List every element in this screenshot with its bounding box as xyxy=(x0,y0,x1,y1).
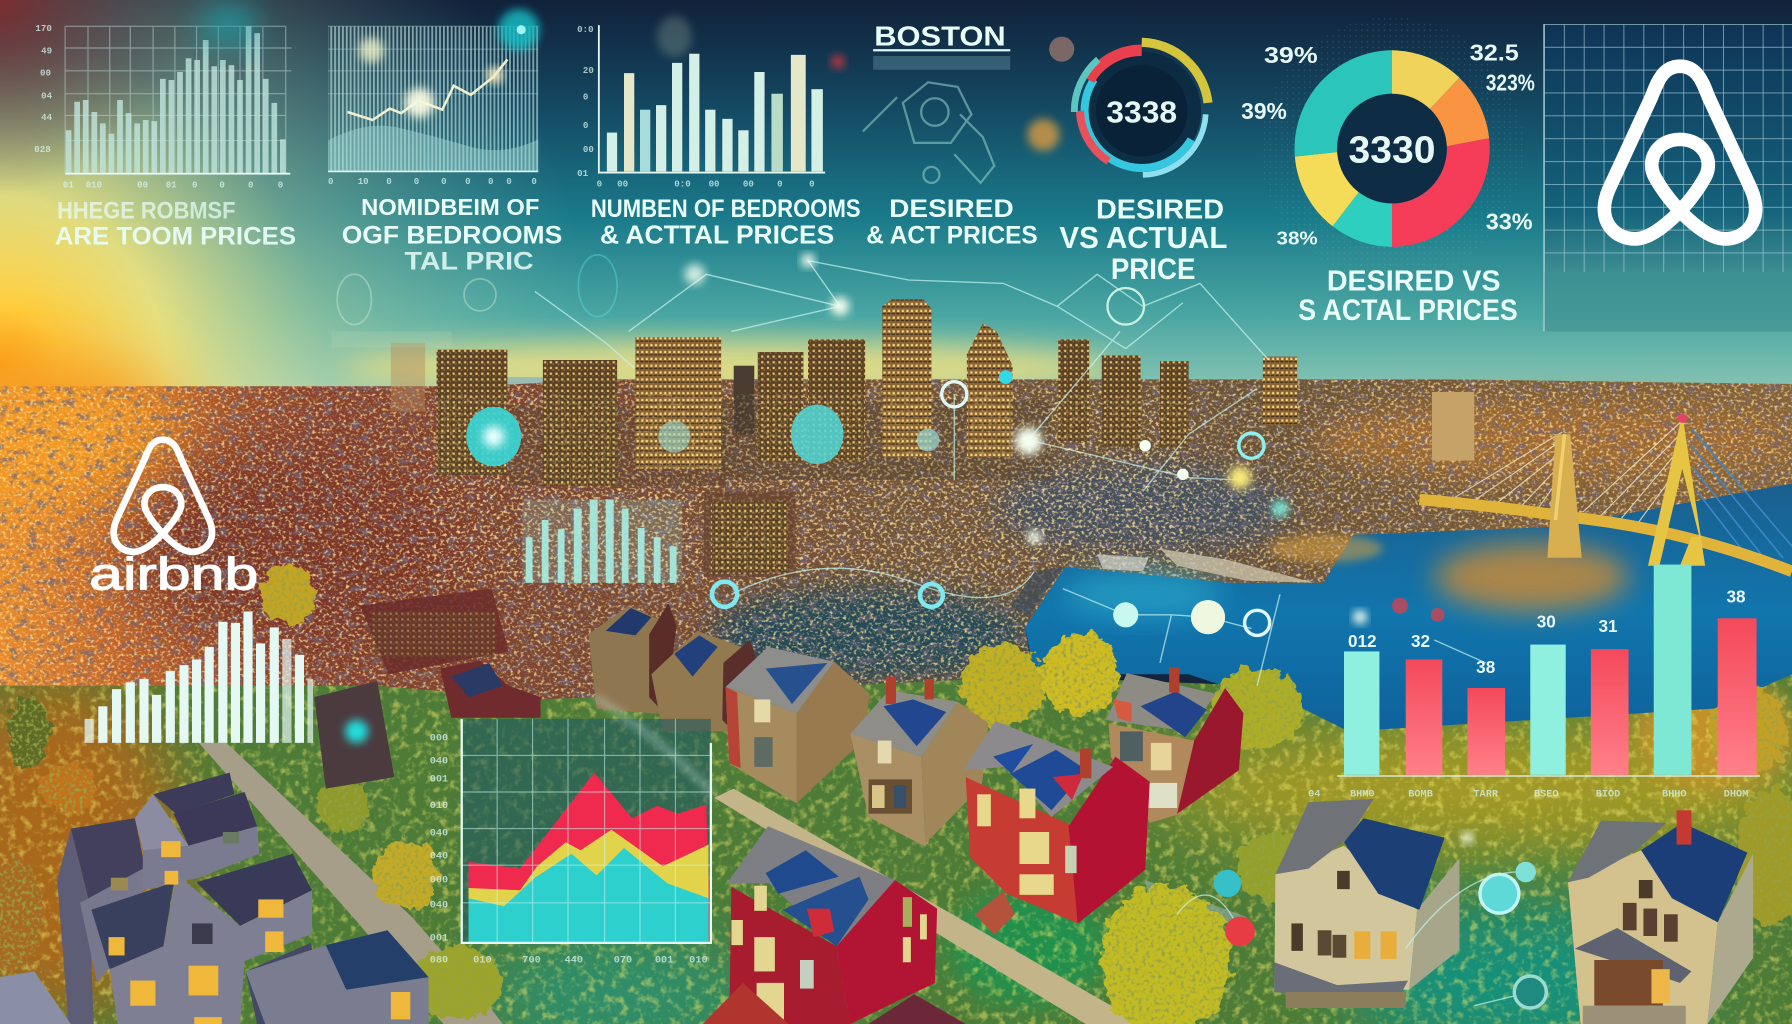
red area xyxy=(469,773,711,942)
chart: small ring gauge xyxy=(1027,33,1220,189)
chart 1 axis labels: 0 xyxy=(219,179,225,190)
chart 3 axis labels: 01 xyxy=(577,168,589,179)
glow streak xyxy=(594,697,714,794)
bar axis labels: BHM0 xyxy=(1350,789,1375,801)
chart 1 axis labels: 010 xyxy=(86,179,102,190)
area chart labels: 440 xyxy=(565,954,583,966)
heading: chart 3 caption: & ACTTAL PRICES xyxy=(600,219,834,249)
chart: desired vs actual price bars xyxy=(1308,565,1760,801)
chart 2 axis labels xyxy=(328,176,537,187)
chart 3 axis labels: 0:0 xyxy=(674,178,691,189)
skyline of downtown towers xyxy=(391,299,1474,583)
chart 3 axis labels: 0 xyxy=(809,178,815,189)
yellow area xyxy=(469,830,709,942)
chart 1 axis labels: 00 xyxy=(40,67,51,78)
heading: chart 3 caption: NUMBEN OF BEDROOMS xyxy=(591,195,861,223)
heading: desired vs actual price: PRICE xyxy=(1111,253,1195,286)
icon: large Airbnb logo xyxy=(1604,66,1756,239)
bar value labels: 38 xyxy=(1726,586,1746,606)
bar value labels: 38 xyxy=(1476,657,1495,677)
heading: chart 1 caption: ARE TOOM PRICES xyxy=(55,223,296,251)
chart 2 axis labels: 0 xyxy=(414,176,419,187)
chart: bedrooms bar chart xyxy=(577,16,845,189)
chart 3 bars xyxy=(607,54,823,171)
ringed nodes xyxy=(712,288,1546,1008)
panel: harbor water xyxy=(1025,483,1792,743)
heading: chart 2 caption: TAL PRIC xyxy=(405,248,534,276)
donut percentages: 39% xyxy=(1264,42,1318,68)
chart 3 axis labels: 0 xyxy=(583,120,588,131)
background: sky and sunrise glow xyxy=(0,0,1792,411)
area chart labels: 010 xyxy=(689,954,708,966)
map panel: Boston title xyxy=(873,21,1010,70)
area chart labels: 001 xyxy=(655,954,673,966)
heading: chart 1 caption xyxy=(55,197,296,251)
bar axis labels: TARR xyxy=(1473,789,1499,801)
chart 1 grid and axis xyxy=(65,26,291,174)
donut percentages: 39% xyxy=(1241,98,1287,124)
roads through the neighbourhood xyxy=(199,743,1246,1024)
bar axis labels: BHHO xyxy=(1662,789,1687,801)
chart 2 axis labels: 0 xyxy=(506,176,512,187)
bar axis labels: BSEO xyxy=(1534,789,1559,801)
chart 3 axis labels: 00 xyxy=(709,178,720,189)
bar value labels: 012 xyxy=(1348,631,1377,651)
chart 2 axis labels: 0 xyxy=(441,176,447,187)
area chart labels: 040 xyxy=(430,827,448,839)
chart 3 axis labels xyxy=(577,24,815,189)
heading: desired actual caption xyxy=(866,195,1038,249)
area chart labels: 010 xyxy=(473,954,492,966)
bar axis labels: 04 xyxy=(1308,789,1320,801)
chart 2 axis labels: 0 xyxy=(465,176,471,187)
chart 1 axis labels: 49 xyxy=(41,46,52,57)
donut percentages: 33% xyxy=(1486,209,1533,235)
harbor piers and boats xyxy=(1011,549,1314,617)
donut centre value: 3330 xyxy=(1349,128,1435,170)
Airbnb wordmark: airbnb xyxy=(89,549,258,600)
chart 3 axis labels: 00 xyxy=(617,178,628,189)
chart 2 axis labels: 10 xyxy=(358,176,369,187)
heading: chart 1 caption: HHEGE ROBMSF xyxy=(57,197,235,224)
glow behind chart 1 xyxy=(199,2,258,48)
chart 1 axis labels: 028 xyxy=(34,144,51,155)
chart 1 axis labels: 01 xyxy=(63,179,74,190)
area chart labels: 001 xyxy=(430,933,448,945)
house: beige house lower centre xyxy=(1274,799,1459,1008)
map panel: Boston title: BOSTON xyxy=(874,21,1006,52)
donut segments xyxy=(1295,50,1490,247)
chart: white bars over left neighbourhood xyxy=(85,611,313,743)
chart 1 axis labels: 01 xyxy=(166,179,177,190)
bar value labels: 32 xyxy=(1411,631,1430,651)
donut percentages: 323% xyxy=(1486,69,1535,95)
logo: Airbnb mark with wordmark xyxy=(89,440,258,600)
chart 1 axis labels: 00 xyxy=(137,179,148,190)
heading: chart 3 caption xyxy=(591,195,861,249)
heading: desired vs actual price xyxy=(1059,193,1227,286)
area chart labels: 080 xyxy=(430,954,448,966)
faint overlay icons above skyline xyxy=(331,255,617,347)
house: beige house lower right xyxy=(1568,810,1753,1024)
chart: line over price distribution xyxy=(328,9,539,187)
bar value labels: 30 xyxy=(1537,611,1556,631)
teal area xyxy=(469,848,709,942)
heading: desired actual caption: & ACT PRICES xyxy=(866,221,1038,249)
heading: desired vs actual price: VS ACTUAL xyxy=(1059,220,1227,255)
red marker nodes xyxy=(1225,598,1445,946)
donut percentages: 32.5 xyxy=(1470,40,1519,66)
heading: desired vs actual prices xyxy=(1298,265,1518,327)
chart: teal bars on downtown building xyxy=(522,499,682,583)
heading: desired vs actual prices: S ACTAL PRICES xyxy=(1298,294,1518,327)
chart 3 axis labels: 0 xyxy=(583,91,588,102)
area chart labels: 010 xyxy=(430,800,448,812)
large teal hubs xyxy=(466,405,939,466)
area chart labels: 070 xyxy=(614,954,632,966)
chart 2 fine vertical bars xyxy=(328,26,538,171)
bar axis labels xyxy=(1308,789,1748,801)
distant brick row houses xyxy=(314,589,757,789)
ring gauge value: 3338 xyxy=(1106,94,1177,129)
chart 2 axis labels: 0 xyxy=(531,176,537,187)
chart: large donut xyxy=(1241,17,1535,280)
area chart labels: 000 xyxy=(430,874,448,886)
chart 1 axis labels xyxy=(34,23,283,190)
bar axis labels: BIOD xyxy=(1596,789,1620,801)
heading: chart 2 caption: NOMIDBEIM OF xyxy=(361,194,539,220)
chart 1 axis labels: 0 xyxy=(278,179,283,190)
bar axis labels: BOMB xyxy=(1408,789,1433,801)
panel: Boston city ground xyxy=(0,354,1792,757)
chart 2 trend line xyxy=(347,59,507,120)
chart 3 axis labels: 20 xyxy=(583,65,594,76)
trees xyxy=(0,565,1792,1024)
area chart labels: 040 xyxy=(430,850,448,862)
chart 1 axis labels: 0 xyxy=(192,179,197,190)
icon: cable-stayed bridge xyxy=(1419,414,1792,571)
chart 1 bars xyxy=(69,26,283,174)
chart 1 axis labels: 170 xyxy=(35,23,52,34)
area chart labels xyxy=(430,733,708,966)
donut percentages: 38% xyxy=(1277,228,1318,249)
chart 3 axis labels: 0:0 xyxy=(577,24,594,35)
chart 3 axis labels: 0 xyxy=(777,178,783,189)
panel: Airbnb grid logo xyxy=(1544,24,1792,331)
chart: area chart over street xyxy=(430,697,714,966)
area chart labels: 001 xyxy=(430,774,448,786)
house: upper red house with dormers xyxy=(1106,667,1243,823)
chart 2 glow nodes xyxy=(359,9,539,118)
area chart labels: 040 xyxy=(430,899,448,911)
area chart labels: 700 xyxy=(522,954,541,966)
donut percentages xyxy=(1241,40,1535,249)
bar value labels xyxy=(1348,586,1746,677)
chart 2 axis labels: 0 xyxy=(386,176,392,187)
heading: chart 2 caption xyxy=(342,194,562,276)
house: tan house with red trim xyxy=(726,647,870,803)
house: bottom red house xyxy=(703,826,966,1024)
bright glow nodes xyxy=(345,254,1536,897)
heading: desired vs actual prices: DESIRED VS xyxy=(1327,265,1501,297)
heading: desired vs actual price: DESIRED xyxy=(1096,193,1224,224)
chart 3 axis labels: 00 xyxy=(743,178,754,189)
house: grey houses lower left xyxy=(0,773,429,1024)
house: tan townhouse with blue dormer xyxy=(850,677,989,847)
chart 1 axis labels: 04 xyxy=(41,90,53,101)
network of data nodes and links xyxy=(345,254,1546,1008)
chart 2 axis labels: 0 xyxy=(488,176,493,187)
chart 1 axis labels: 44 xyxy=(41,112,53,123)
chart grid xyxy=(462,719,711,942)
chart 3 axis labels: 0 xyxy=(597,178,602,189)
icon: neighbourhood map shapes xyxy=(863,82,994,183)
panel: foreground neighbourhood greenery xyxy=(0,640,1792,1024)
chart 3 axis labels: 00 xyxy=(583,144,594,155)
house: large central red house xyxy=(963,721,1150,935)
city light texture xyxy=(0,379,1792,700)
chart: bedroom price histogram xyxy=(34,23,291,190)
bar axis labels: DHOM xyxy=(1724,789,1748,801)
heading: chart 2 caption: OGF BEDROOMS xyxy=(342,221,562,249)
bar value labels: 31 xyxy=(1598,616,1618,636)
chart 1 axis labels: 0 xyxy=(248,179,253,190)
chart 2 axis labels: 0 xyxy=(328,176,333,187)
area chart labels: 040 xyxy=(430,755,448,767)
area chart labels: 000 xyxy=(430,733,448,745)
heading: desired actual caption: DESIRED xyxy=(889,195,1014,223)
